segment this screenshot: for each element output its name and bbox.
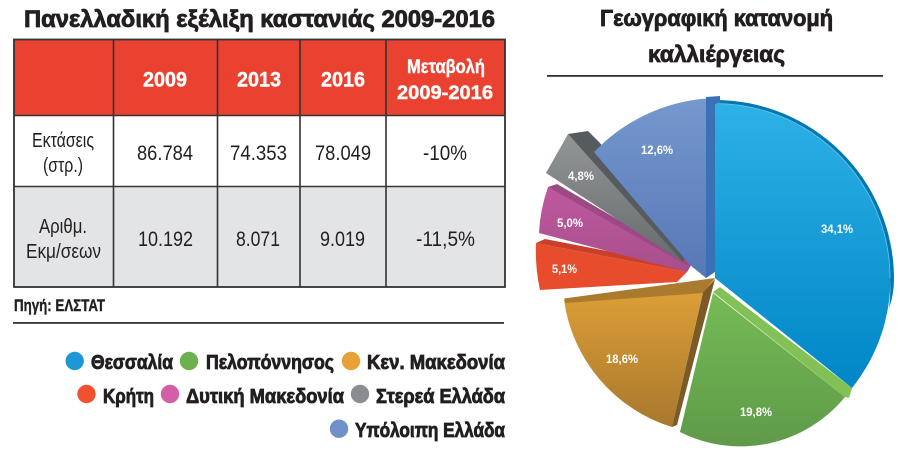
table row: areas: Εκτάσεις [32,130,94,152]
table header row [14,39,505,115]
table row: holdings: Εκμ/σεων [26,241,101,263]
title: pie heading [600,5,833,67]
title: pie heading: καλλιέργειας [648,41,785,67]
slice: Central Greece 4.8% [546,131,685,262]
table row: holdings: 8.071 [236,228,280,251]
legend [66,351,505,442]
slice: Rest of Greece 12.6%: 12,6% [641,145,673,157]
table header row: 2009 [143,68,187,92]
legend item: Central Macedonia: Κεν. Μακεδονία [367,351,505,374]
table row: holdings: 9.019 [320,228,365,251]
pie chart: geographic distribution [536,96,894,446]
table row: areas: 86.784 [137,142,193,165]
legend item: Crete [77,385,154,408]
slice: Central Greece 4.8%: 4,8% [568,171,594,183]
slice: Western Macedonia 5.0% [539,184,692,272]
table header row: 2016 [321,68,365,92]
title: table heading: Πανελλαδική εξέλιξη καστανιάς 2009-2016 [24,6,495,33]
slice: Central Macedonia 18.6%: 18,6% [606,354,638,366]
legend item: Thessaly [66,351,173,374]
table row: areas: (στρ.) [43,155,83,177]
legend item: Western Macedonia: Δυτική Μακεδονία [186,385,344,408]
table: national chestnut trends [14,39,505,287]
title: pie heading: Γεωγραφική κατανομή [600,5,833,31]
table row: holdings: Αριθμ. [39,216,87,238]
table row: areas: 78.049 [315,142,371,165]
source note: Πηγή: ΕΛΣΤΑΤ [14,296,105,315]
table row: holdings: 10.192 [138,228,193,251]
legend item: Thessaly: Θεσσαλία [91,351,173,374]
legend item: Peloponnese: Πελοπόννησος [206,351,334,374]
legend item: Central Greece: Στερεά Ελλάδα [376,385,505,408]
legend item: Crete: Κρήτη [103,385,154,408]
table row: areas [14,115,505,187]
slice: Crete 5.1%: 5,1% [552,264,577,276]
legend item: Rest of Greece: Υπόλοιπη Ελλάδα [355,419,505,442]
slice: Rest of Greece 12.6% [594,96,720,278]
table header row: Μεταβολή [407,57,485,78]
slice: Peloponnese 19.8%: 19,8% [740,407,772,419]
table row: areas: -10% [423,142,467,165]
table row: holdings [14,187,505,287]
table header row: 2013 [237,68,281,92]
slice: Peloponnese 19.8% [680,287,852,446]
slice: Central Macedonia 18.6% [564,278,715,427]
table header row: 2009-2016 [397,83,493,104]
slice: Western Macedonia 5.0%: 5,0% [557,218,583,230]
table row: holdings: -11,5% [416,228,475,251]
slice: Thessaly 34.1%: 34,1% [821,224,853,236]
slice: Crete 5.1% [536,239,690,290]
slice: Thessaly 34.1% [715,100,894,388]
table row: areas: 74.353 [230,142,287,165]
